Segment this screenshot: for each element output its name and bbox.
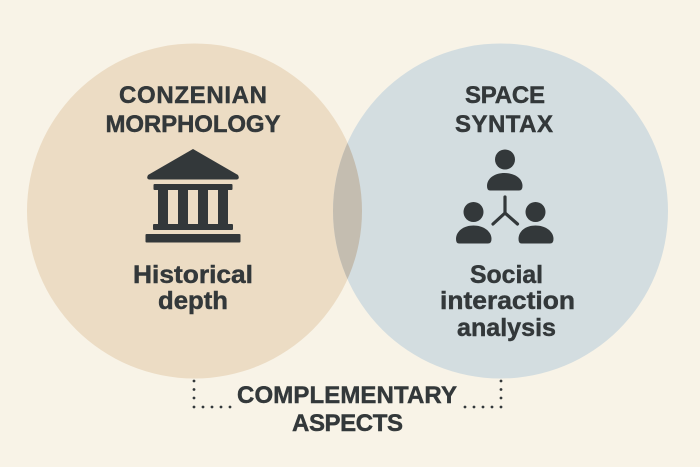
text: Social interaction analysis: analysis bbox=[457, 314, 556, 342]
caption: complementary aspects: ASPECTS bbox=[292, 410, 403, 437]
text: Social interaction analysis: Social bbox=[470, 261, 543, 289]
heading: Conzenian morphology: MORPHOLOGY bbox=[106, 111, 280, 138]
overlap region bbox=[333, 143, 362, 279]
heading: Space syntax bbox=[455, 82, 553, 138]
panel: Space syntax circle bbox=[333, 44, 668, 378]
caption: complementary aspects bbox=[237, 382, 457, 437]
text: Social interaction analysis bbox=[440, 261, 575, 342]
text: Social interaction analysis: interaction bbox=[440, 287, 575, 315]
icon: classical building bbox=[146, 149, 240, 242]
left dotted bracket bbox=[193, 380, 231, 408]
icon: connected people network bbox=[456, 150, 554, 244]
heading: Conzenian morphology bbox=[106, 82, 280, 138]
text: Historical depth: depth bbox=[158, 287, 228, 315]
heading: Space syntax: SYNTAX bbox=[455, 111, 553, 138]
caption: complementary aspects: COMPLEMENTARY bbox=[237, 382, 457, 409]
text: Historical depth bbox=[133, 261, 253, 315]
right dotted bracket bbox=[464, 380, 502, 408]
heading: Conzenian morphology: CONZENIAN bbox=[119, 82, 267, 109]
venn diagram infographic bbox=[27, 44, 668, 432]
panel: Conzenian morphology circle bbox=[27, 44, 362, 378]
heading: Space syntax: SPACE bbox=[465, 82, 545, 109]
text: Historical depth: Historical bbox=[133, 261, 253, 289]
